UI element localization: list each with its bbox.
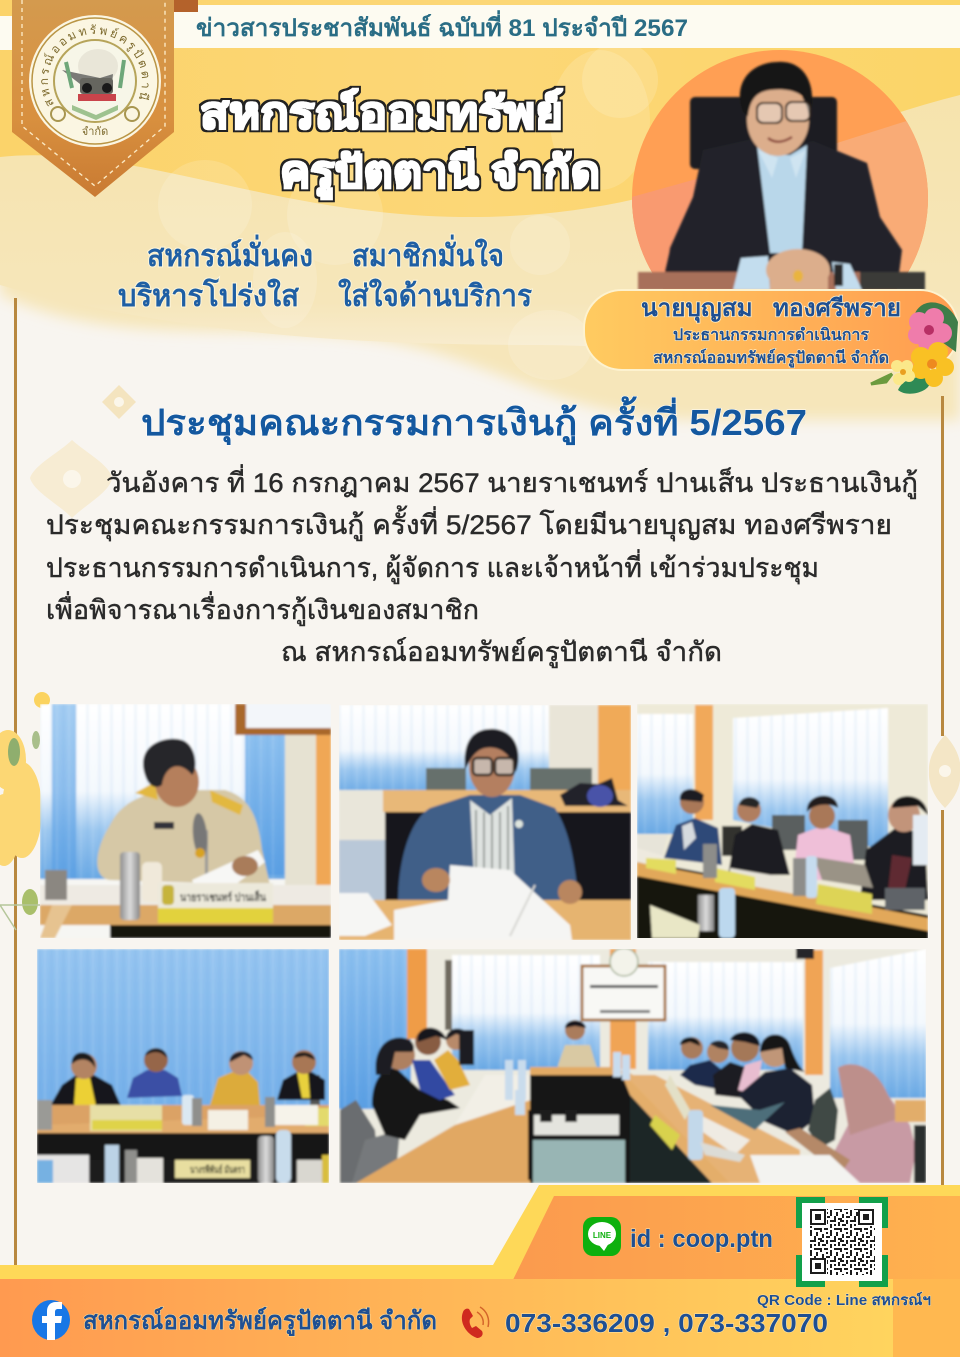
main title: สหกรณ์ออมทรัพย์ — [200, 88, 563, 138]
portrait of chairman — [632, 50, 928, 290]
ribbon badge — [12, 0, 198, 197]
photo 2: chairman with documents — [339, 705, 631, 940]
line icon: LINE — [593, 1231, 612, 1240]
chairman organisation: สหกรณ์ออมทรัพย์ครูปัตตานี จำกัด — [653, 348, 889, 369]
body text: ประธานกรรมการดำเนินการ, ผู้จัดการ และเจ้าหน้าที่ เข้าร่วมประชุม — [46, 549, 819, 585]
main title — [200, 88, 600, 199]
logo seal: สหกรณ์ออมทรัพย์ครูปัตตานี — [41, 24, 150, 106]
main title: ครูปัตตานี จำกัด — [280, 148, 600, 199]
line icon — [583, 1217, 621, 1256]
body text: เพื่อพิจารณาเรื่องการกู้เงินของสมาชิก — [46, 591, 479, 626]
motto — [118, 234, 532, 313]
body text — [46, 464, 918, 668]
footer contact panel — [508, 1196, 960, 1290]
motto: สมาชิกมั่นใจ — [352, 234, 504, 273]
line id: id : coop.ptn — [630, 1225, 773, 1253]
motto: ใส่ใจด้านบริการ — [338, 278, 532, 313]
photo 4: four members at table — [37, 949, 329, 1183]
side ornament right — [929, 735, 960, 808]
facebook icon — [32, 1300, 70, 1340]
photo 1: chairman of loans reading — [40, 704, 331, 938]
body text: วันอังคาร ที่ 16 กรกฎาคม 2567 นายราเชนทร์ ปานเส็น ประธานเงินกู้ — [106, 464, 918, 499]
logo seal — [29, 15, 161, 147]
facebook page name: สหกรณ์ออมทรัพย์ครูปัตตานี จำกัด — [83, 1306, 437, 1337]
frame lines — [14, 298, 944, 1265]
tropical flowers — [871, 302, 958, 394]
body text: ณ สหกรณ์ออมทรัพย์ครูปัตตานี จำกัด — [281, 636, 722, 668]
ornament small beside title — [102, 385, 136, 419]
newsletter line: ข่าวสารประชาสัมพันธ์ ฉบับที่ 81 ประจำปี 2567 — [196, 10, 688, 42]
chairman name: นายบุญสม ทองศรีพราย — [641, 295, 901, 324]
chairman role: ประธานกรรมการดำเนินการ — [673, 326, 869, 344]
logo seal: จำกัด — [82, 126, 108, 138]
body text: ประชุมคณะกรรมการเงินกู้ ครั้งที่ 5/2567 โดยมีนายบุญสม ทองศรีพราย — [46, 505, 892, 542]
photo 5: full meeting room — [339, 949, 926, 1183]
side flowers left — [0, 692, 50, 930]
qr caption: QR Code : Line สหกรณ์ฯ — [757, 1291, 931, 1309]
meeting title: ประชุมคณะกรรมการเงินกู้ ครั้งที่ 5/2567 — [141, 396, 807, 446]
motto: สหกรณ์มั่นคง — [147, 234, 313, 273]
footer yellow band — [0, 1185, 960, 1357]
name plate — [584, 290, 958, 370]
phone numbers: 073-336209 , 073-337070 — [505, 1308, 828, 1338]
photo 1: chairman of loans reading: นายราเชนทร์ ปานเส็น — [180, 890, 266, 904]
motto: บริหารโปร่งใส — [118, 277, 300, 313]
footer bottom band — [0, 1279, 960, 1357]
header strip — [0, 5, 960, 50]
photo 3: committee members at table — [637, 704, 928, 938]
ornament behind body text — [30, 440, 112, 518]
qr code — [799, 1200, 885, 1284]
photo 4: four members at table: นางรพีพันธ์ มันตรา — [190, 1164, 245, 1176]
phone icon — [462, 1307, 489, 1338]
